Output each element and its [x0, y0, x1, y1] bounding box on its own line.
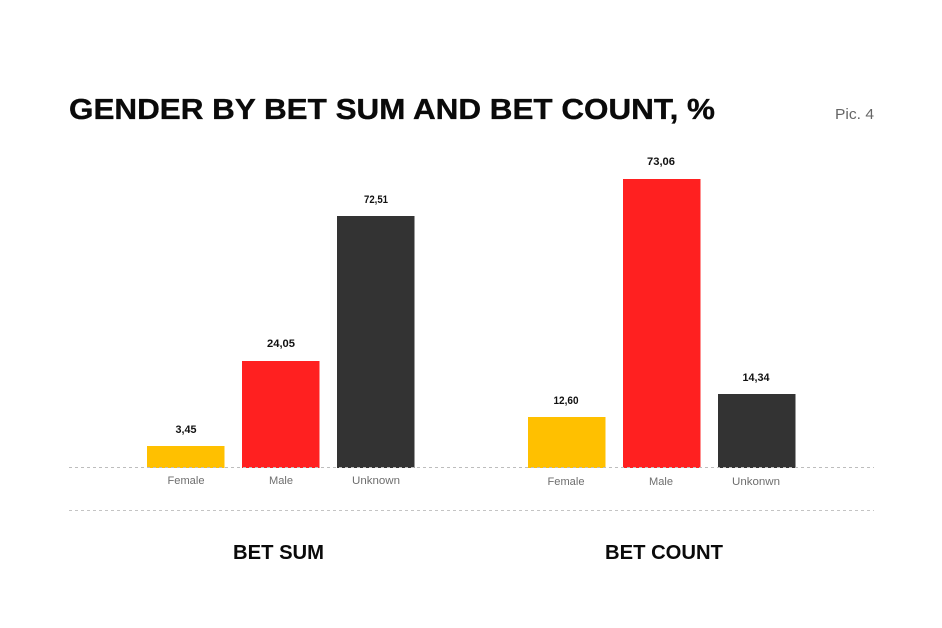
picture number: Pic. 4	[835, 106, 874, 123]
value: female: 3,45	[176, 424, 196, 436]
label: male: Male	[649, 476, 673, 488]
label: female: Female	[168, 475, 204, 487]
value: female: 12,60	[554, 395, 578, 407]
bar: female 12,60	[528, 417, 606, 468]
heading: bet sum: BET SUM	[233, 542, 324, 564]
label: female: Female	[548, 476, 584, 488]
bar: unknown 14,34	[718, 394, 796, 468]
label: unkonwn: Unkonwn	[732, 476, 780, 488]
chart: bet count	[528, 156, 796, 488]
value: male: 73,06	[647, 156, 675, 168]
label: unknown: Unknown	[352, 475, 400, 487]
value: unknown: 72,51	[364, 194, 388, 206]
value: unknown: 14,34	[742, 372, 770, 384]
bar: male 24,05	[242, 361, 320, 468]
bar: male 73,06	[623, 179, 700, 468]
chart: bet sum	[147, 194, 414, 487]
bar: female 3,45	[147, 446, 224, 468]
bar: unknown 72,51	[337, 216, 414, 468]
label: male: Male	[269, 475, 293, 487]
title: GENDER BY BET SUM AND BET COUNT, %	[69, 94, 715, 126]
value: male: 24,05	[267, 338, 295, 350]
heading: bet count: BET COUNT	[605, 542, 723, 564]
